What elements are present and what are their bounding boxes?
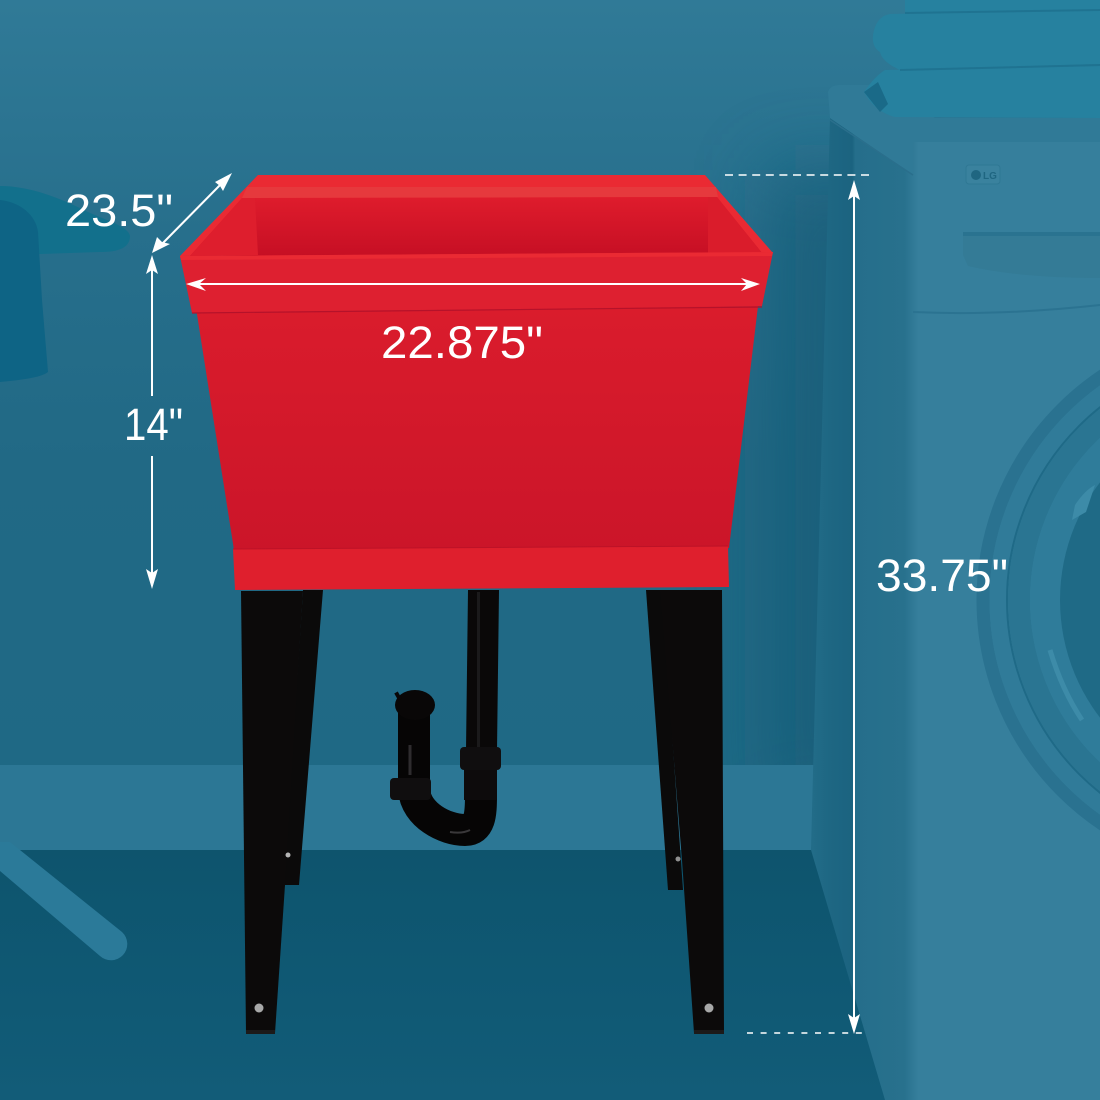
slip nuts [460, 747, 501, 770]
J bend [414, 708, 481, 830]
dimension: 14 inch height: 14" [124, 399, 183, 450]
red utility tub [180, 175, 773, 590]
washer drawer [963, 232, 1100, 278]
washer controls panel edge [913, 305, 1100, 313]
washer LG badge [966, 165, 1000, 184]
icon: ironing board leg [0, 842, 127, 960]
floor [0, 850, 900, 1100]
washer body [811, 118, 1100, 1100]
washer top [828, 85, 1100, 175]
tub bottom band [233, 546, 729, 590]
tub front rim [180, 252, 773, 313]
dimension: 33.75 inch total height: 33.75" [876, 550, 1008, 601]
washing machine [811, 85, 1100, 1100]
tub rim top [180, 175, 773, 256]
icon: folded cloth on the left [0, 186, 130, 382]
baseboard [0, 765, 830, 851]
washer door rings [983, 330, 1100, 870]
dimension: 23.5 inch depth [65, 173, 232, 253]
dimension: 14 inch height [124, 255, 183, 589]
dimension: 22.875 inch width: 22.875" [381, 317, 543, 368]
bolts [254, 1004, 264, 1012]
drain pipe [390, 590, 501, 833]
top flange [395, 690, 435, 720]
vertical tailpiece [466, 590, 499, 750]
sink stand back legs [284, 590, 683, 890]
icon: stacked towels [864, 0, 1100, 118]
background: laundry room wall [0, 0, 1100, 810]
dimension: 23.5 inch depth: 23.5" [65, 185, 173, 236]
tub interior [190, 197, 762, 256]
dimension: 22.875 inch width [186, 278, 760, 368]
dimension: 33.75 inch total height [725, 175, 1008, 1034]
washer LG badge: LG [983, 171, 997, 182]
tub body [196, 306, 758, 550]
sink stand front legs [241, 590, 724, 1034]
